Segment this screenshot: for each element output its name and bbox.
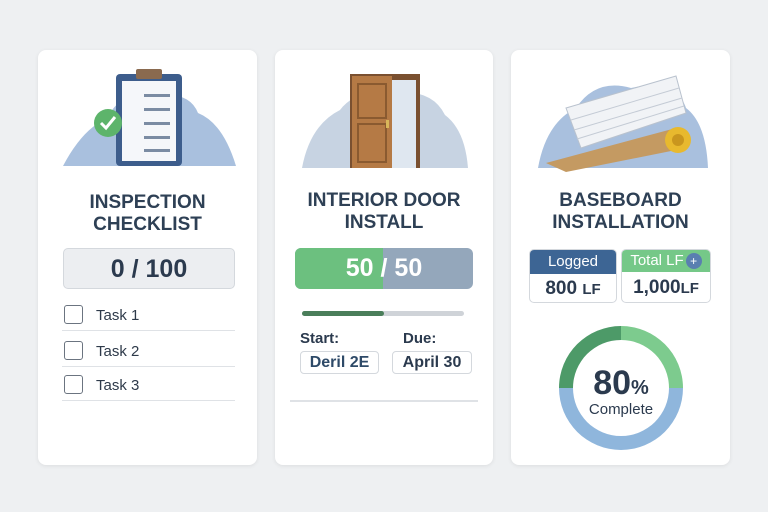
- total box: 1,000LF: [633, 277, 699, 298]
- icon: clipboard: [63, 69, 236, 166]
- task list: Task 2: [96, 343, 139, 360]
- logged box: 800 LF: [545, 278, 601, 299]
- logged box: [529, 249, 617, 303]
- donut chart 80%: [559, 326, 683, 450]
- heading: INSTALLATION: [552, 212, 689, 233]
- task list: Task 3: [96, 377, 139, 394]
- card: baseboard installation: [511, 50, 730, 465]
- due date: April 30: [403, 354, 461, 371]
- task list: [62, 305, 235, 401]
- total box: [621, 249, 711, 303]
- due date: [392, 330, 472, 374]
- score box: [63, 248, 235, 289]
- donut chart 80%: Complete: [589, 401, 653, 418]
- card: interior door install: [275, 50, 493, 465]
- total box: Total LF: [630, 252, 684, 269]
- progress slider: [302, 311, 464, 316]
- progress count bar: [295, 248, 473, 289]
- card: inspection checklist: [38, 50, 257, 465]
- score box: 0 / 100: [111, 255, 187, 283]
- total box: +: [690, 254, 697, 268]
- start date: [300, 330, 379, 374]
- heading: [89, 192, 206, 235]
- heading: INSTALL: [345, 212, 423, 233]
- heading: CHECKLIST: [93, 214, 202, 235]
- heading: BASEBOARD: [559, 190, 682, 211]
- heading: [307, 190, 461, 233]
- icon: door: [302, 74, 468, 168]
- logged box: Logged: [548, 253, 598, 270]
- task list: Task 1: [96, 307, 139, 324]
- progress count bar: 50 / 50: [346, 254, 422, 282]
- start date: Start:: [300, 330, 339, 347]
- donut chart 80%: 80%: [593, 364, 649, 402]
- heading: INSPECTION: [89, 192, 206, 213]
- due date: Due:: [403, 330, 436, 347]
- heading: [552, 190, 689, 233]
- start date: Deril 2E: [310, 354, 369, 371]
- heading: INTERIOR DOOR: [307, 190, 461, 211]
- icon: baseboard and tape: [538, 76, 708, 172]
